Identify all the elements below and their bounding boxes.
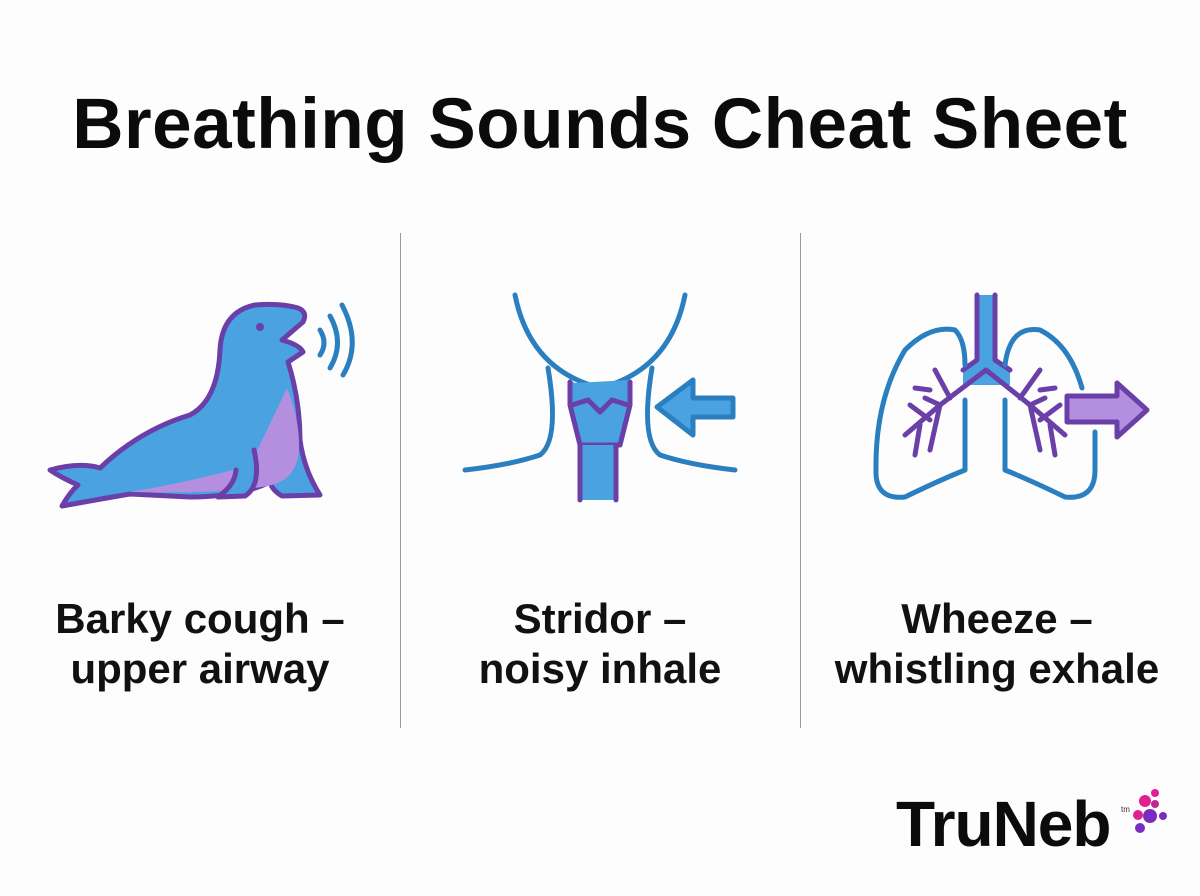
label: wheeze bbox=[834, 595, 1159, 692]
logo: TruNeb: tm bbox=[1121, 805, 1130, 814]
label: stridor bbox=[479, 595, 721, 692]
label: wheeze: whistling exhale bbox=[835, 645, 1159, 692]
label: stridor: noisy inhale bbox=[479, 645, 721, 692]
title: Breathing Sounds Cheat Sheet bbox=[72, 85, 1128, 164]
label: stridor: Stridor – bbox=[514, 595, 686, 642]
icon: lungs with outward arrow bbox=[876, 295, 1147, 497]
label: wheeze: Wheeze – bbox=[901, 595, 1093, 642]
label: barky cough bbox=[55, 595, 345, 692]
logo: TruNeb: TruNeb bbox=[896, 788, 1110, 860]
icon: seal barking bbox=[50, 304, 352, 506]
label: barky cough: upper airway bbox=[70, 645, 330, 692]
label: barky cough: Barky cough – bbox=[55, 595, 345, 642]
icon: throat with inward arrow bbox=[465, 295, 735, 500]
